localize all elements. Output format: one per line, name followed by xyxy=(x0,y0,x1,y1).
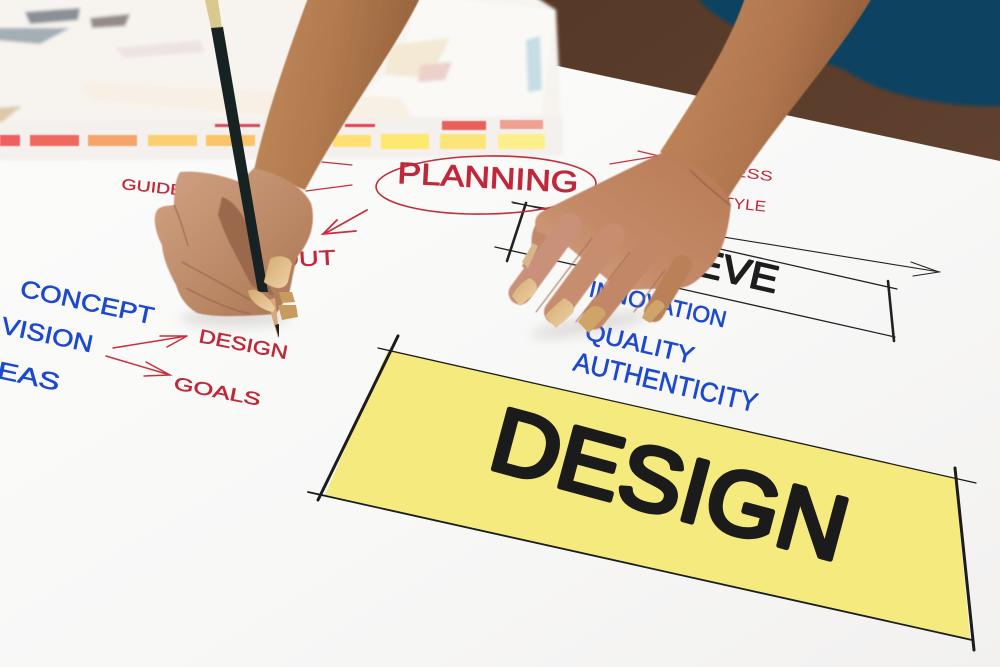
pencil xyxy=(205,0,279,338)
planning bubble xyxy=(376,154,596,216)
right arm xyxy=(660,0,872,198)
right hand xyxy=(520,150,731,322)
soft hand shadows xyxy=(180,307,650,343)
red text: GOALS: GOALS xyxy=(172,373,262,410)
blue text: INNOVATION: INNOVATION xyxy=(587,276,729,332)
banner frame lines xyxy=(308,336,976,650)
red text: PROCESS: PROCESS xyxy=(677,155,774,184)
left hand xyxy=(155,168,313,316)
right hand nails xyxy=(512,243,664,333)
achieve box xyxy=(495,202,940,341)
left hand nails xyxy=(248,256,298,320)
red text: GUIDE: GUIDE xyxy=(121,176,184,199)
red text: LAYOUT: LAYOUT xyxy=(227,246,336,275)
heading: DESIGN: DESIGN xyxy=(481,390,858,581)
background: blue jeans xyxy=(695,0,1000,106)
blue text: QUALITY: QUALITY xyxy=(583,319,697,370)
planning bubble: PLANNING xyxy=(397,157,579,199)
left arm xyxy=(254,0,420,190)
blue text: AUTHENTICITY: AUTHENTICITY xyxy=(571,347,761,418)
blurred reference sheets xyxy=(0,0,563,161)
blue text: VISION: VISION xyxy=(0,312,95,358)
red text: STYLE: STYLE xyxy=(711,193,767,216)
colour swatch strip xyxy=(0,120,545,149)
red mind-map arrows and labels xyxy=(106,151,659,376)
blue text: CONCEPT: CONCEPT xyxy=(18,275,157,330)
label: ACHIEVE: ACHIEVE xyxy=(591,219,783,302)
red text: DESIGN: DESIGN xyxy=(197,326,289,364)
yellow design banner xyxy=(325,350,970,639)
